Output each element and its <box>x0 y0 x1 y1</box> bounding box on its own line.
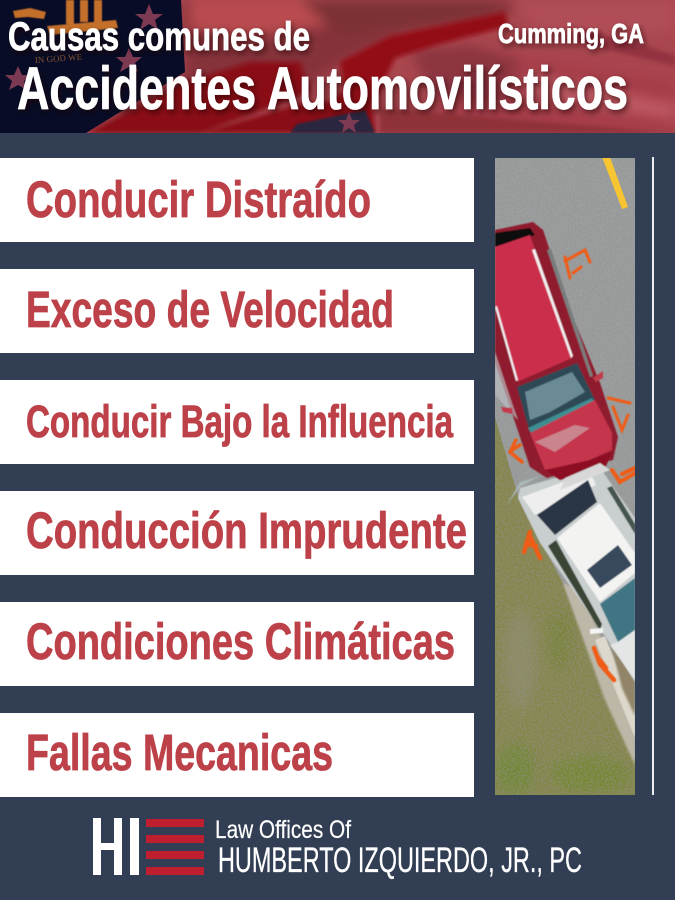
photo: aerial view of car crash <box>495 157 635 796</box>
cause 5 <box>0 602 474 686</box>
cause 3 <box>0 380 474 464</box>
cause 6 <box>0 713 474 797</box>
flag motto: IN GOD WE <box>34 52 83 65</box>
cause 4: Conducción Imprudente <box>26 502 467 559</box>
panel: causes list <box>0 158 474 797</box>
orange spray paint marks <box>510 250 635 680</box>
red van <box>495 222 618 490</box>
white car <box>507 468 635 682</box>
heading: Causas comunes de: Causas comunes de <box>8 15 310 59</box>
header banner: flag background <box>0 0 675 133</box>
cause 3: Conducir Bajo la Influencia <box>26 396 454 447</box>
cause 6: Fallas Mecanicas <box>26 724 333 781</box>
cause 1: Conducir Distraído <box>26 171 371 228</box>
logo: HI monogram with stripes <box>93 818 204 875</box>
vertical divider line <box>652 157 654 795</box>
cause 4 <box>0 491 474 575</box>
cause 2 <box>0 269 474 353</box>
cause 2: Exceso de Velocidad <box>26 281 394 338</box>
firm name: Law Offices Of: Law Offices Of <box>215 816 351 844</box>
cause 1 <box>0 158 474 242</box>
cause 5: Condiciones Climáticas <box>26 613 455 670</box>
